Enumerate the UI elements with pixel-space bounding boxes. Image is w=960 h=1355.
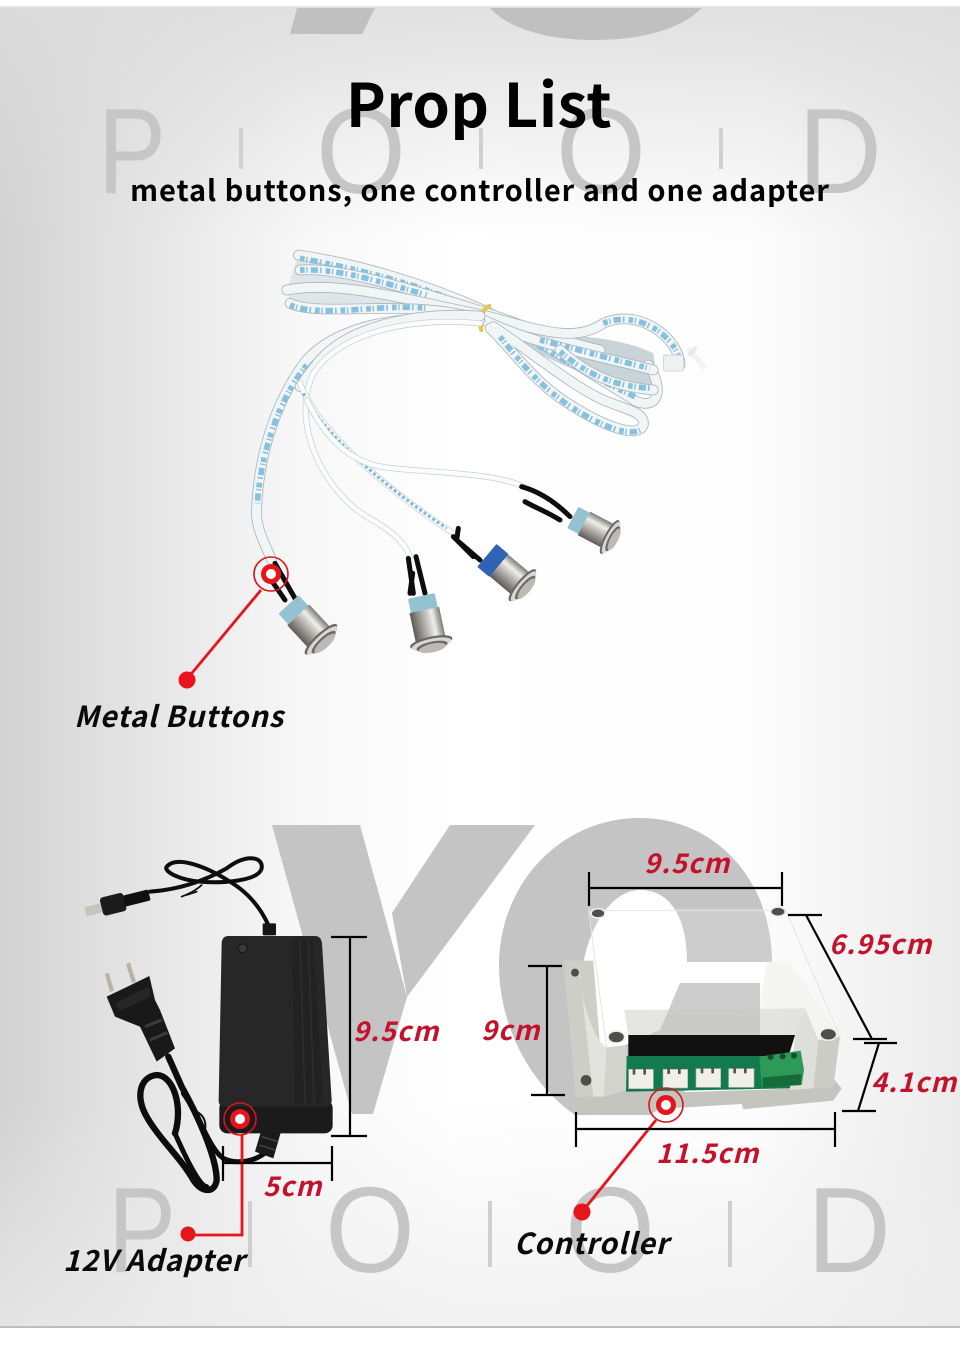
black terminal wires: [270, 487, 570, 600]
watermark: top PIOIOID row: P: [98, 83, 166, 219]
dimension: controller side: 9cm: [481, 1009, 541, 1048]
dimension: controller side: [481, 966, 565, 1095]
subtitle: metal buttons, one controller and one adapter: [130, 168, 830, 210]
dimension: adapter height: 9.5cm: [353, 1010, 440, 1049]
circuit board interior: [628, 1035, 795, 1057]
watermark: top logo fragment: [290, 8, 702, 40]
yellow rubber band: [481, 306, 489, 330]
watermark: bottom PIOIOID row: P: [108, 1162, 176, 1298]
callout: metal buttons pointer: [178, 557, 288, 688]
adapter body: [219, 936, 333, 1158]
coiled ribbon cables: [287, 255, 680, 432]
dimension: controller depth: 6.95cm: [829, 923, 933, 962]
watermark: top PIOIOID row: D: [798, 83, 882, 219]
dimension: adapter width: [223, 1146, 332, 1204]
green terminal block: [759, 1051, 804, 1087]
front pillars: [604, 1045, 628, 1097]
watermark: top PIOIOID row: O: [556, 83, 646, 219]
connector: [663, 347, 705, 371]
label: 12V adapter: 12V Adapter: [63, 1238, 249, 1280]
dimension: controller top width: [589, 842, 782, 906]
watermark: bottom PIOIOID row: O: [325, 1162, 415, 1298]
button 2: [400, 591, 454, 657]
watermark: large Ye logo: [272, 818, 790, 1115]
case side: [579, 963, 607, 1097]
callout: controller pointer: [574, 1088, 683, 1220]
dimension: controller base width: 11.5cm: [656, 1132, 760, 1171]
dimension: adapter width: 5cm: [263, 1165, 323, 1204]
dimension: controller top width: 9.5cm: [644, 842, 731, 881]
watermark: top PIOIOID row: O: [316, 83, 406, 219]
label: metal buttons: Metal Buttons: [74, 694, 286, 736]
title: Prop List: [346, 58, 612, 145]
button 3: [474, 540, 543, 607]
dimension: controller height: [842, 1043, 958, 1111]
DC plug and cable: [83, 858, 276, 935]
AC plug and cable: [105, 963, 268, 1190]
watermark: bottom PIOIOID row: [108, 1162, 891, 1298]
watermark: bottom PIOIOID row: O: [565, 1162, 655, 1298]
lead wires: [256, 315, 523, 560]
white JST connectors: [629, 1069, 754, 1089]
left flange and DIN rail base: [563, 961, 604, 1098]
screw holes: [591, 907, 837, 1043]
button 1: [273, 590, 344, 661]
button 4: [564, 501, 626, 558]
watermark: top PIOIOID row: [98, 83, 882, 219]
photo: 12V adapter: [83, 858, 333, 1190]
photo: metal buttons with ribbon cables: [256, 255, 705, 661]
translucent lid: [588, 908, 840, 1047]
photo: controller: [563, 907, 842, 1114]
callout: adapter pointer: [180, 1103, 256, 1242]
dimension: controller height: 4.1cm: [871, 1061, 958, 1100]
dimension: controller base width: [576, 1112, 835, 1171]
window interior: [624, 1008, 805, 1037]
dimension: adapter height: [331, 937, 440, 1136]
label: controller: Controller: [514, 1221, 673, 1263]
dimension: controller depth: [788, 915, 933, 1039]
watermark: bottom PIOIOID row: D: [807, 1162, 891, 1298]
